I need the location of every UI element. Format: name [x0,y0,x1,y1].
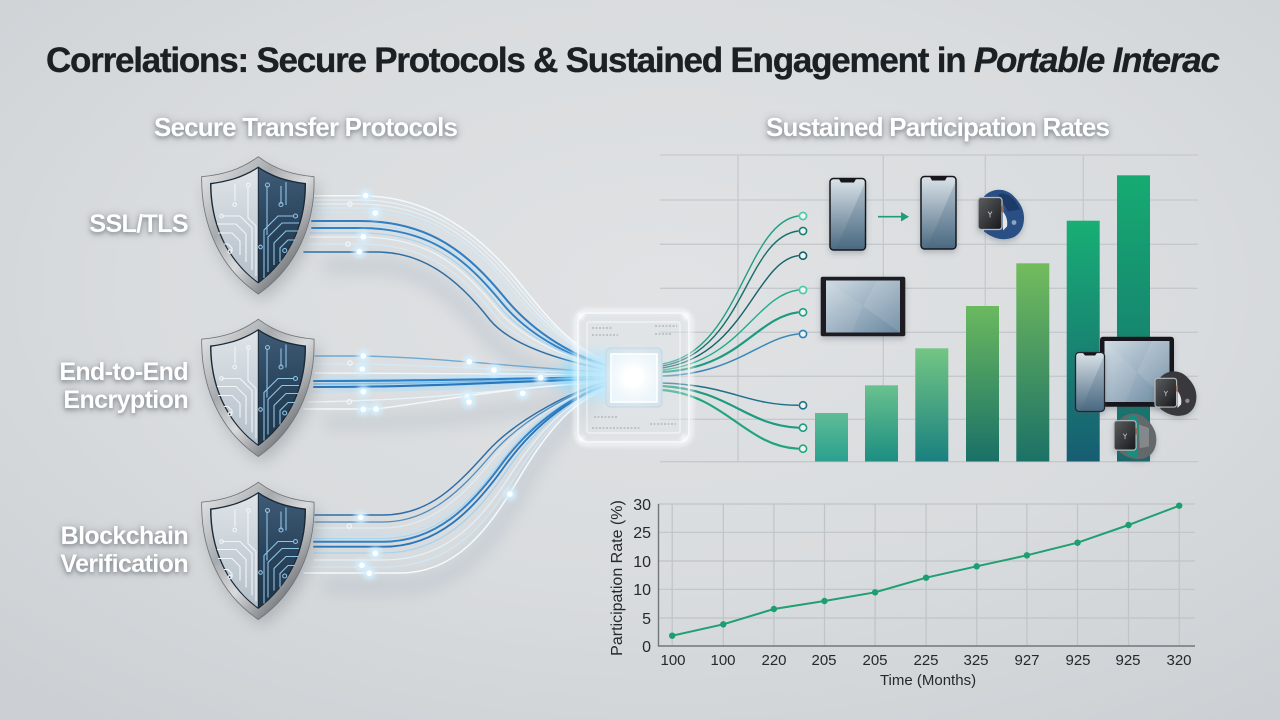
central processor hub [560,311,691,444]
label: SSL/TLS: SSL/TLS [89,210,188,238]
x axis labels: 325 [963,652,989,669]
y axis labels: 10 [633,582,651,599]
x axis labels: 220 [761,652,787,669]
bar chart: sustained participation [660,155,1198,462]
bar 1 [815,413,848,462]
x axis labels: 925 [1065,652,1091,669]
y axis title: Participation Rate (%) [609,500,626,656]
line chart: participation rate over time [609,497,1195,689]
label: End-to-End Encryption: End-to-End [59,358,188,386]
icon: smartwatch, grey band [1114,414,1156,459]
y axis labels [633,497,651,656]
shield: Blockchain Verification [202,482,318,626]
output lines to devices [662,216,798,449]
y axis labels: 5 [642,611,651,628]
icon: phone [830,178,866,250]
x axis labels: 205 [862,652,888,669]
icon: tablet [821,277,905,336]
arrow: phone upgrade [878,212,909,222]
bar 4 [966,306,999,462]
label: Blockchain Verification: Blockchain [61,522,188,550]
bar 5 [1016,263,1049,462]
x axis labels: 925 [1115,652,1141,669]
icon: smartwatch, black band [1155,371,1196,416]
data flow lines from shield: End-to-End Encryption [304,356,620,409]
heading: sustained participation rates: Sustained Participation Rates [766,112,1110,142]
label: End-to-End Encryption: Encryption [63,386,188,414]
x axis labels: 320 [1166,652,1192,669]
y axis labels: 30 [633,497,651,514]
x axis title: Time (Months) [880,672,976,689]
bar 6 [1067,221,1100,462]
y axis labels: 0 [642,639,651,656]
bar 3 [915,348,948,462]
shield: End-to-End Encryption [202,319,318,462]
heading: secure transfer protocols: Secure Transfer Protocols [154,112,458,142]
icon: phone [1076,352,1104,412]
icon: smartwatch, blue band [978,190,1024,239]
data flow lines from shield: Blockchain Verification [304,378,620,573]
axes [658,504,1195,646]
x axis labels: 205 [811,652,837,669]
data flow lines from shield: SSL/TLS [304,196,620,373]
title: Correlations: Secure Protocols & Sustained Engagement in Portable Interac [46,41,1220,80]
bar 2 [865,385,898,462]
soft shadows under flow lines [330,266,590,586]
label: Blockchain Verification: Verification [60,550,188,578]
x axis labels: 100 [660,652,686,669]
data line [669,502,1182,639]
x axis labels [660,652,1192,669]
y axis labels: 25 [633,525,651,542]
icon: phone [921,176,956,249]
y axis labels: 10 [633,554,651,571]
output nodes [799,212,807,452]
icon: tablet [1100,337,1174,407]
glowing data points [346,189,547,580]
shield: SSL/TLS [202,157,318,300]
bar 7 [1117,175,1150,462]
icon: device cluster [1076,337,1196,459]
x axis labels: 225 [913,652,939,669]
x axis labels: 927 [1014,652,1040,669]
x axis labels: 100 [710,652,736,669]
